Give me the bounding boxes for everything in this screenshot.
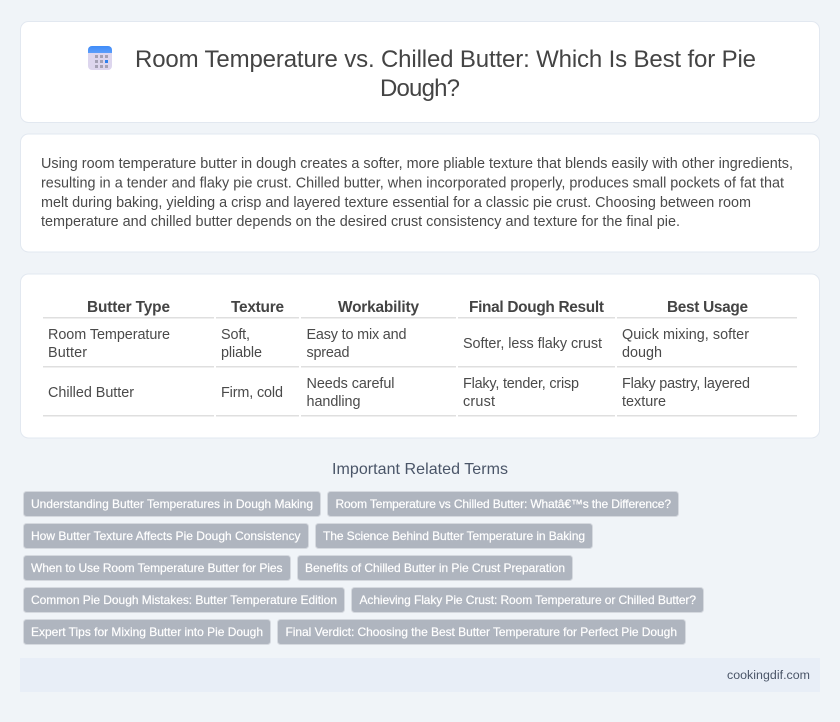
table row: chilled butter: Flaky pastry, layered (622, 376, 750, 392)
table row: chilled butter: Firm, cold (221, 385, 283, 401)
table row: room temperature butter: Soft, (221, 327, 250, 343)
table row: chilled butter: crust (463, 394, 495, 410)
table header: Workability (338, 299, 419, 316)
panel: introduction (20, 134, 820, 252)
table row: chilled butter: Needs careful (306, 376, 394, 392)
panel: header (20, 22, 820, 122)
table row: room temperature butter: Quick mixing, softer (622, 327, 749, 343)
table header: Best Usage (667, 299, 748, 316)
tag group: related terms: Benefits of Chilled Butter in Pie Crust Preparation (305, 561, 565, 575)
table row: chilled butter: texture (622, 394, 666, 410)
tag group: related terms: How Butter Texture Affects Pie Dough Consistency (31, 529, 300, 543)
tag group: related terms: Expert Tips for Mixing Butter into Pie Dough (31, 625, 263, 639)
text block: introduction: Using room temperature butter in dough creates a softer, more pliable texture that blends easily with other ingredients, (41, 156, 793, 172)
title: Dough? (380, 75, 460, 102)
tag group: related terms: Achieving Flaky Pie Crust: Room Temperature or Chilled Butter? (360, 593, 696, 607)
table header (87, 299, 748, 316)
tag group: related terms: Final Verdict: Choosing the Best Butter Temperature for Perfect Pie Dough (286, 625, 677, 639)
tag group: related terms: Room Temperature vs Chilled Butter: Whatâ€™s the Difference? (336, 497, 671, 511)
table row: room temperature butter: spread (306, 345, 350, 361)
table row: room temperature butter: Softer, less flaky crust (463, 336, 602, 352)
text block: introduction (41, 156, 793, 230)
text block: introduction: melt during baking, yielding a crisp and layered texture essential for a classic pie crust. Choosing between room (41, 195, 751, 211)
tag group: related terms: The Science Behind Butter Temperature in Baking (323, 529, 585, 543)
icon: calendar (88, 46, 112, 70)
tag group: related terms (24, 492, 704, 644)
table row: room temperature butter: Easy to mix and (306, 327, 406, 343)
footer (20, 658, 820, 692)
table row: chilled butter: Flaky, tender, crisp (463, 376, 579, 392)
heading: related terms: Important Related Terms (332, 461, 508, 478)
table header: Final Dough Result (469, 299, 604, 316)
table row: room temperature butter (48, 327, 749, 361)
panel: comparison table (20, 274, 820, 438)
tag group: related terms: Common Pie Dough Mistakes: Butter Temperature Edition (31, 593, 337, 607)
table row: chilled butter: handling (306, 394, 360, 410)
footer: cookingdif.com (727, 668, 810, 682)
table header: Texture (231, 299, 284, 316)
table row: room temperature butter: dough (622, 345, 662, 361)
text block: introduction: resulting in a tender and flaky pie crust. Chilled butter, when incorporated properly, produces small pockets of fat that (41, 176, 784, 192)
table header: Butter Type (87, 299, 170, 316)
title: Room Temperature vs. Chilled Butter: Which Is Best for Pie (135, 46, 756, 73)
table row: room temperature butter: Butter (48, 345, 87, 361)
tag group: related terms: When to Use Room Temperature Butter for Pies (31, 561, 282, 575)
table row: chilled butter (48, 376, 750, 410)
table row: room temperature butter: Room Temperature (48, 327, 170, 343)
table row: room temperature butter: pliable (221, 345, 262, 361)
tag group: related terms: Understanding Butter Temperatures in Dough Making (31, 497, 313, 511)
title (135, 46, 756, 102)
text block: introduction: temperature and chilled butter depends on the desired crust consistency and texture for the final pie. (41, 214, 680, 230)
table row: chilled butter: Chilled Butter (48, 385, 134, 401)
